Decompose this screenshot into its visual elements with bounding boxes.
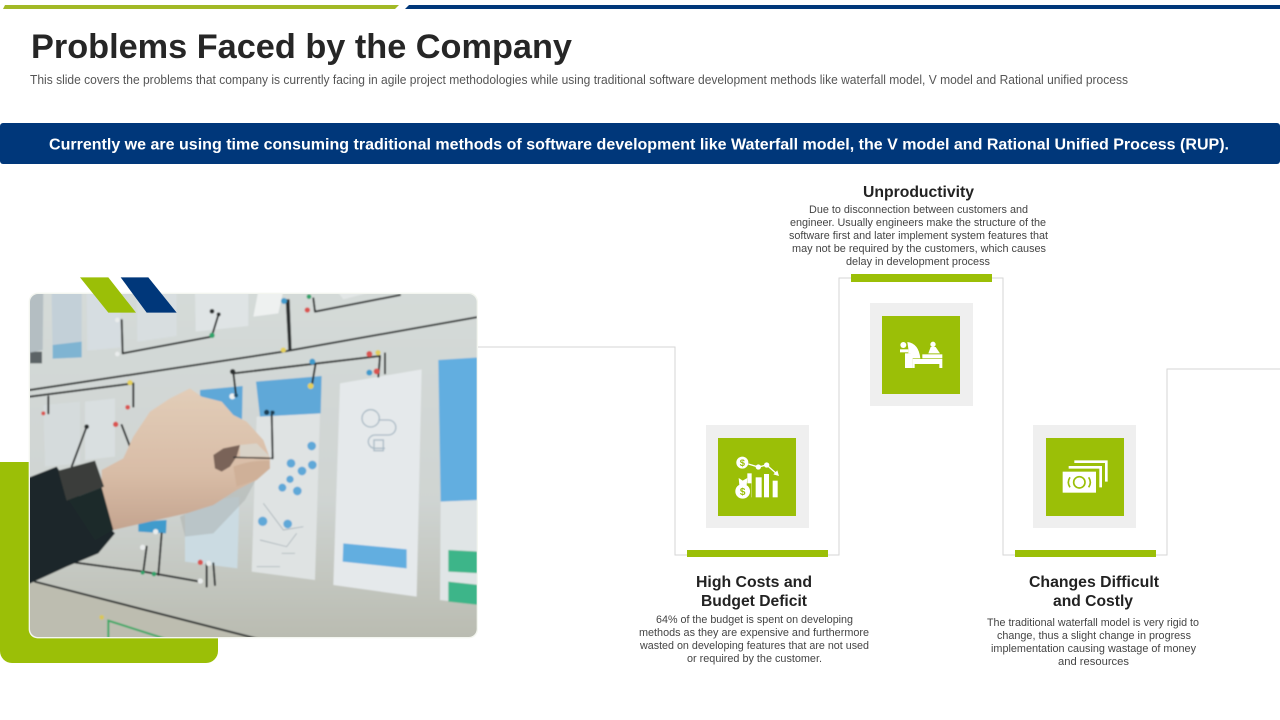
- icon: unproductive person on bed: [870, 303, 973, 406]
- left paper and blue patches: [199, 385, 244, 420]
- subtitle: This slide covers the problems that company is currently facing in agile project methodologies while using traditional software development methods like waterfall model, V model and Rational unified process: [30, 73, 1128, 87]
- bar: high costs: [687, 550, 828, 557]
- green backing shape: [0, 462, 218, 663]
- top accent bars: [3, 5, 1280, 9]
- bar: unproductivity: [851, 274, 992, 282]
- text: unproductivity: Unproductivity: [863, 184, 974, 201]
- text: unproductivity: engineer. Usually engineers make the structure of the: [790, 217, 1046, 229]
- hand shadow: [180, 478, 257, 537]
- center paper: [252, 413, 320, 580]
- icon: money bag and falling chart: [706, 425, 809, 528]
- pins: [41, 294, 381, 620]
- banner: [0, 123, 1280, 164]
- text: unproductivity: delay in development process: [846, 256, 990, 268]
- text: unproductivity: [789, 184, 1048, 268]
- text: high costs and budget deficit: or required by the customer.: [687, 653, 822, 665]
- connector line: [477, 278, 1280, 555]
- lower wall: [30, 582, 123, 607]
- text: unproductivity: may not be required by the customers, which causes: [792, 243, 1046, 255]
- icon: stack of banknotes: [1033, 425, 1136, 528]
- banner: Currently we are using time consuming traditional methods of software development like Waterfall model, the V model and Rational Unified Process (RUP).: [49, 136, 1229, 154]
- icon: money bag and falling chart: $: [740, 487, 746, 498]
- text: high costs and budget deficit: High Costs and: [696, 574, 812, 591]
- text: high costs and budget deficit: [639, 574, 869, 665]
- text: changes difficult and costly: The traditional waterfall model is very rigid to: [987, 617, 1199, 629]
- hand: [102, 388, 270, 530]
- text: changes difficult and costly: [987, 574, 1199, 668]
- text: high costs and budget deficit: wasted on developing features that are not used: [639, 640, 869, 652]
- text: high costs and budget deficit: Budget Deficit: [701, 593, 808, 610]
- text: changes difficult and costly: Changes Difficult: [1029, 574, 1160, 591]
- upper papers: [30, 352, 42, 363]
- text: high costs and budget deficit: 64% of the budget is spent on developing: [656, 614, 853, 626]
- sleeve: [27, 467, 115, 585]
- text: unproductivity: Due to disconnection between customers and: [809, 204, 1028, 216]
- chevrons: [80, 277, 136, 313]
- text: changes difficult and costly: change, thus a slight change in progress: [997, 630, 1191, 642]
- text: high costs and budget deficit: methods as they are expensive and furthermore: [639, 627, 869, 639]
- watch: [58, 461, 104, 501]
- cloud sketch: [362, 410, 396, 451]
- wires: [30, 295, 480, 640]
- text: changes difficult and costly: and Costly: [1053, 593, 1133, 610]
- icon: money bag and falling chart: $: [740, 458, 746, 468]
- right papers: [333, 369, 422, 597]
- title: Problems Faced by the Company: [31, 28, 572, 66]
- photo: hand pinning wires on a wall of wireframes: [27, 277, 480, 640]
- text: changes difficult and costly: implementation causing wastage of money: [991, 643, 1196, 655]
- text: unproductivity: software first and later implement system features that: [789, 230, 1048, 242]
- text: changes difficult and costly: and resources: [1058, 656, 1129, 668]
- bar: changes difficult: [1015, 550, 1156, 557]
